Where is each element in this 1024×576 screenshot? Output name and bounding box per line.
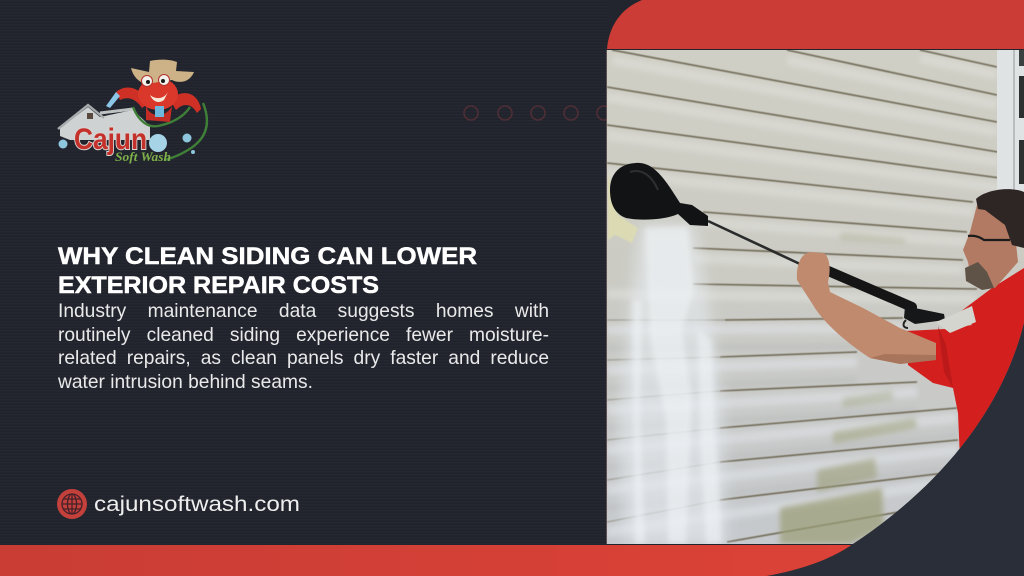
logo subtitle: Soft Wash xyxy=(115,149,171,164)
decorative circle row xyxy=(464,106,611,120)
face xyxy=(963,205,1018,288)
body paragraph: related repairs, as clean panels dry faster and reduce xyxy=(58,348,549,369)
glasses xyxy=(968,236,1010,240)
beard xyxy=(965,262,994,290)
hair xyxy=(976,189,1024,248)
forearm and hand xyxy=(797,252,936,364)
background texture xyxy=(0,0,607,545)
left edge highlight of photo xyxy=(606,50,607,544)
title: EXTERIOR REPAIR COSTS xyxy=(58,272,379,299)
logo crab mascot xyxy=(106,60,201,122)
worker xyxy=(797,189,1024,460)
green algae stains xyxy=(780,232,917,544)
siding seams xyxy=(607,50,1000,542)
title xyxy=(58,243,477,299)
photo: worker washing siding xyxy=(607,50,1024,544)
window trim xyxy=(997,50,1024,195)
website url: cajunsoftwash.com xyxy=(94,492,300,516)
title: WHY CLEAN SIDING CAN LOWER xyxy=(58,243,477,270)
siding wall xyxy=(607,50,1024,544)
bottom right dark corner xyxy=(767,323,1024,576)
top red banner xyxy=(607,0,1024,49)
body paragraph xyxy=(58,301,549,393)
body paragraph: Industry maintenance data suggests homes with xyxy=(58,301,549,322)
logo hose xyxy=(133,103,207,160)
logo wordmark: Cajun xyxy=(74,123,147,156)
spray wand xyxy=(610,163,945,328)
logo house xyxy=(58,105,150,140)
water runoff xyxy=(608,172,726,544)
logo: Cajun Soft Wash xyxy=(58,60,207,164)
body paragraph: routinely cleaned siding experience fewer moisture- xyxy=(58,325,549,346)
red shirt xyxy=(905,268,1024,460)
icon: globe xyxy=(57,489,87,519)
body paragraph: water intrusion behind seams. xyxy=(58,372,313,393)
logo bubbles xyxy=(58,134,195,154)
bottom red banner xyxy=(0,545,853,576)
